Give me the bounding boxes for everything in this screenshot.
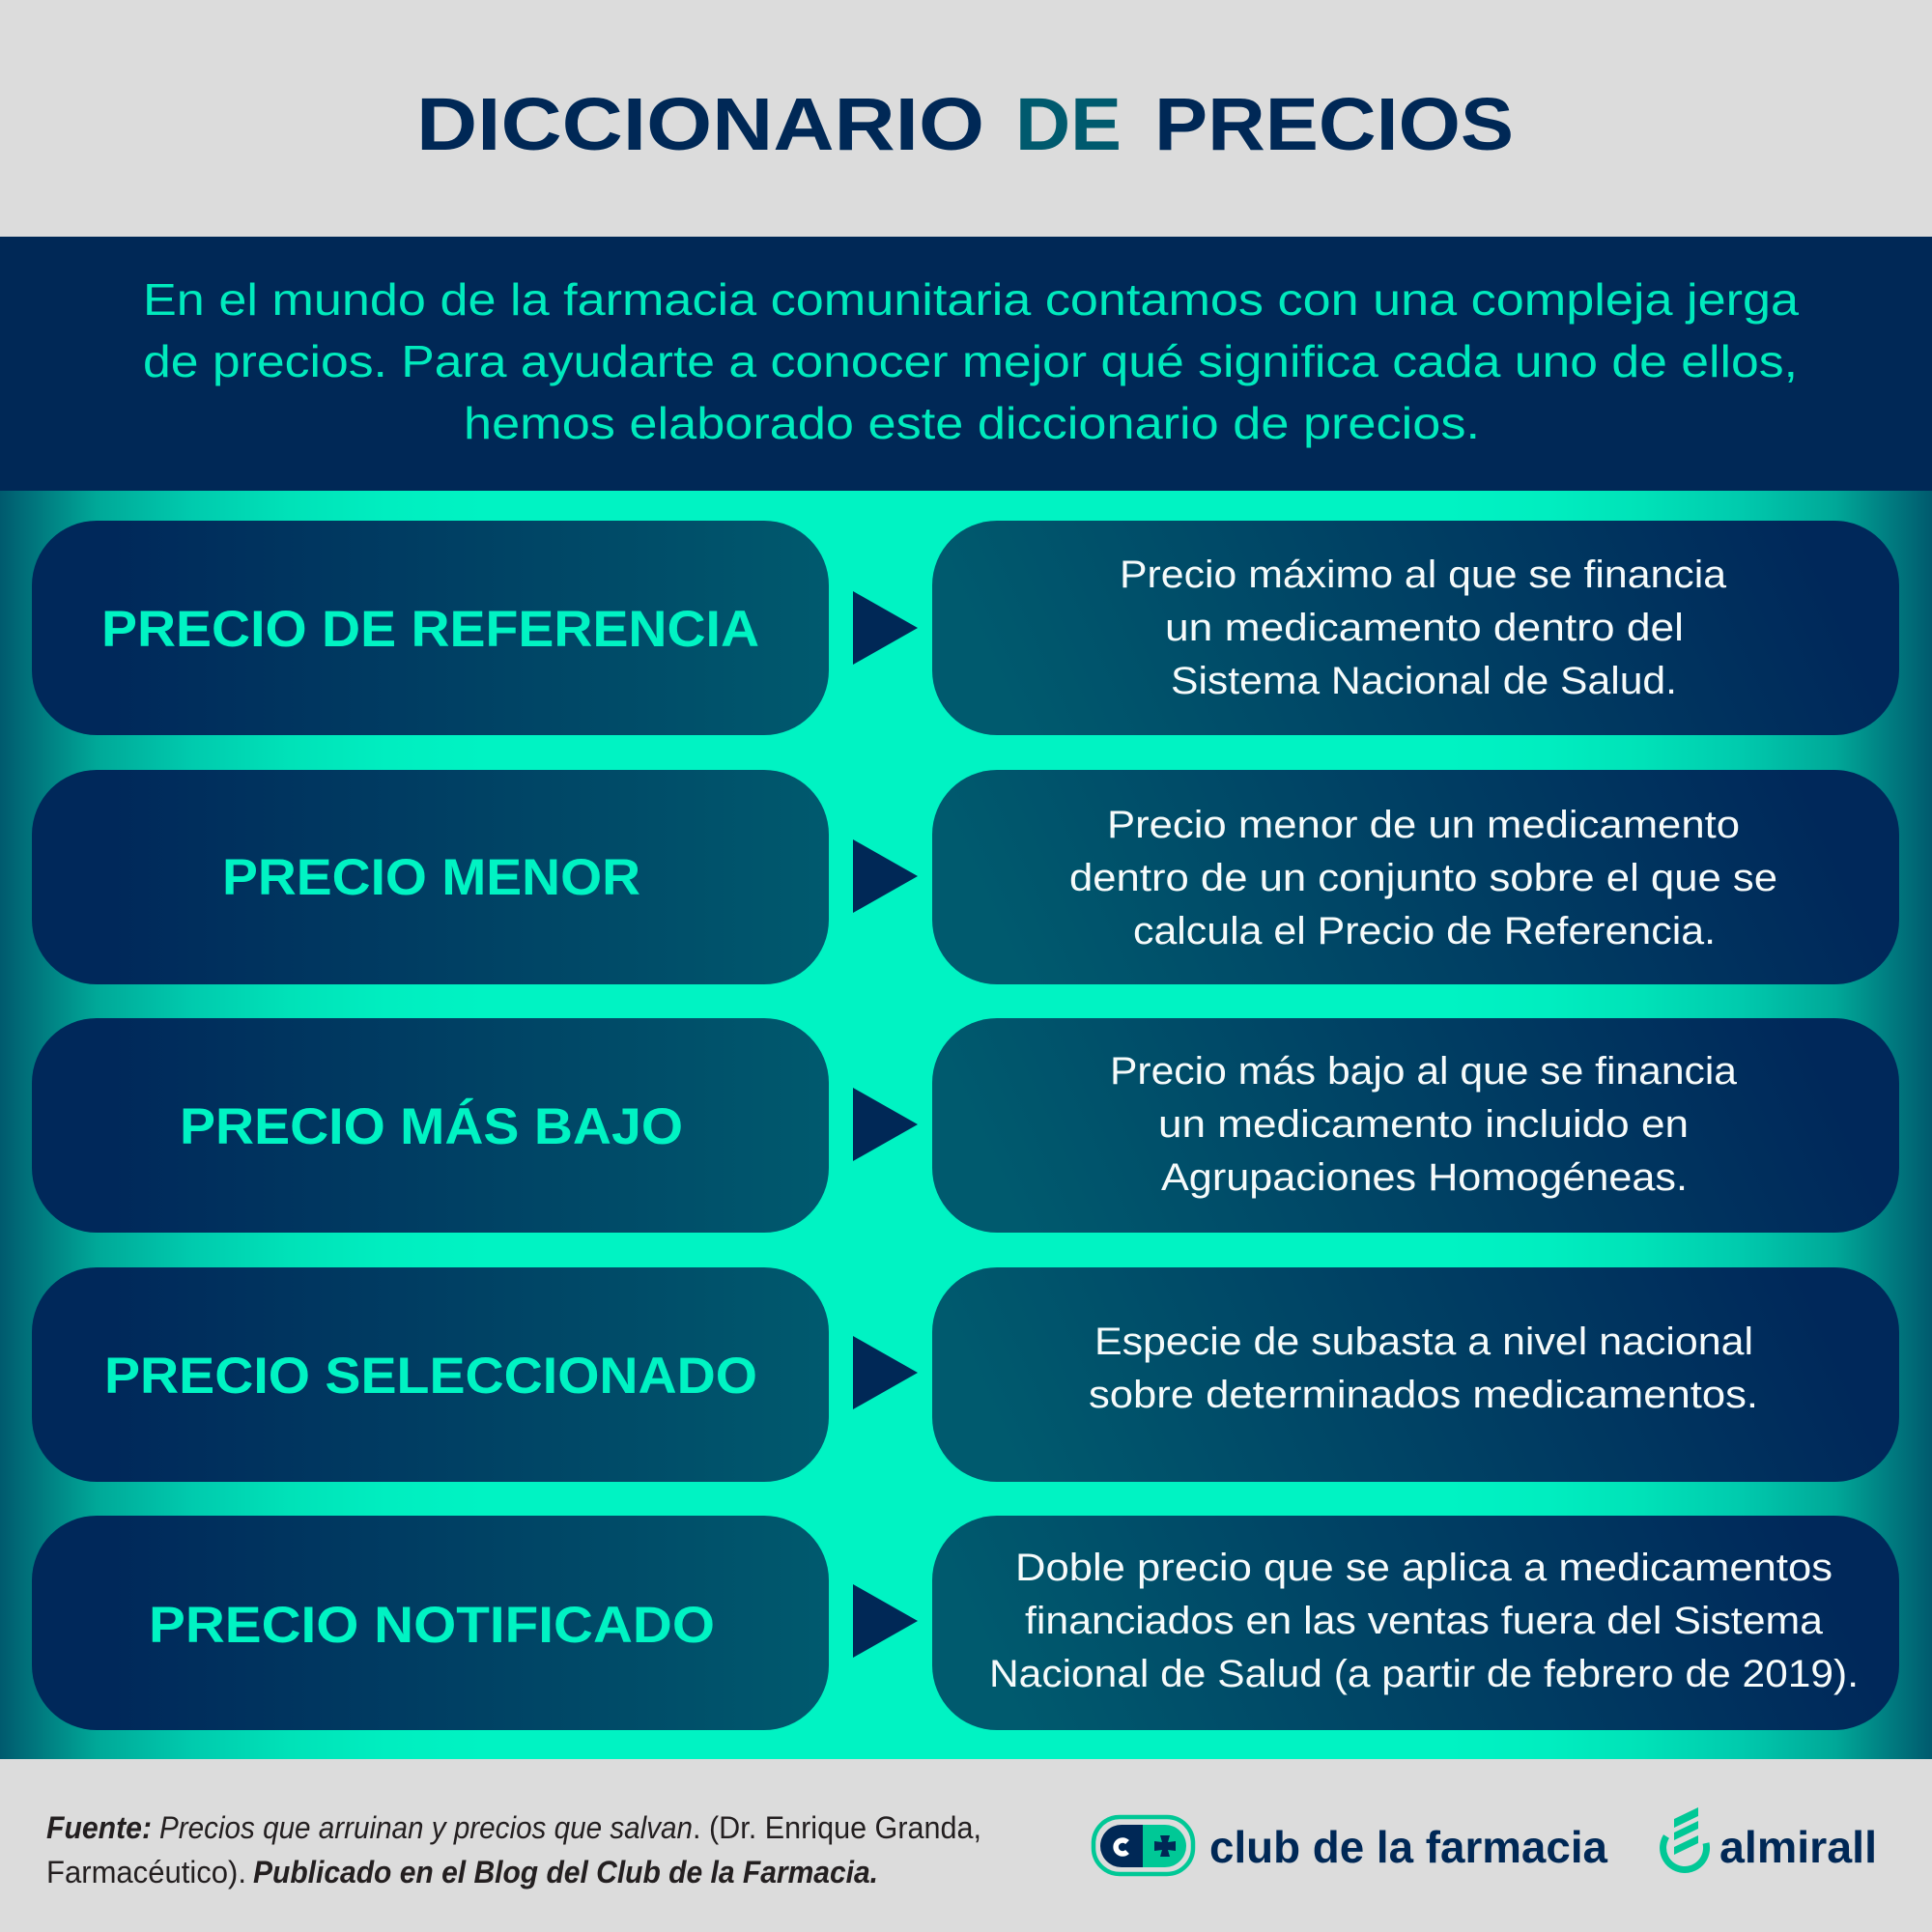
source text: . (Dr. Enrique Granda, [693, 1810, 981, 1845]
definition text [1069, 804, 1777, 952]
term box [32, 770, 829, 984]
definition text: Doble precio que se aplica a medicamentos [1015, 1547, 1833, 1589]
definition text: Agrupaciones Homogéneas. [1161, 1156, 1688, 1199]
definition box [932, 1018, 1899, 1233]
definition text: dentro de un conjunto sobre el que se [1069, 857, 1777, 899]
intro text: hemos elaborado este diccionario de precios. [464, 398, 1480, 448]
definition box [932, 521, 1899, 735]
definition text: Especie de subasta a nivel nacional [1094, 1321, 1753, 1363]
definition text: Sistema Nacional de Salud. [1171, 660, 1677, 702]
header band [0, 0, 1932, 237]
source text: Fuente: [46, 1810, 152, 1845]
row 5: precio notificado [32, 1516, 1899, 1730]
title: PRECIOS [1154, 83, 1514, 166]
definition text: un medicamento incluido en [1158, 1103, 1689, 1146]
wordmark: almirall [1719, 1822, 1877, 1872]
definition text [1110, 1050, 1738, 1199]
gradient background panel [0, 491, 1932, 1759]
row 1: precio de referencia [32, 521, 1899, 735]
definition box [932, 1267, 1899, 1482]
arrow [853, 839, 918, 913]
intro text: En el mundo de la farmacia comunitaria contamos con una compleja jerga [143, 274, 1799, 325]
definition text [1120, 554, 1727, 702]
definition text: Precio máximo al que se financia [1120, 554, 1727, 596]
definition text [989, 1547, 1859, 1695]
arrow [853, 1088, 918, 1161]
title: DICCIONARIO [416, 83, 984, 166]
definition text: Precio más bajo al que se financia [1110, 1050, 1738, 1093]
footer band [0, 1759, 1932, 1932]
definition text: financiados en las ventas fuera del Sistema [1025, 1600, 1824, 1642]
icon: ring [1663, 1836, 1707, 1869]
title [416, 83, 1514, 166]
term box [32, 1516, 829, 1730]
source text: Precios que arruinan y precios que salvan [159, 1810, 693, 1845]
arrow [853, 1336, 918, 1409]
term label: PRECIO DE REFERENCIA [101, 601, 759, 658]
term box [32, 1267, 829, 1482]
definition box [932, 1516, 1899, 1730]
term label: PRECIO MÁS BAJO [180, 1097, 683, 1155]
intro band [0, 237, 1932, 491]
intro text: de precios. Para ayudarte a conocer mejor qué significa cada uno de ellos, [143, 336, 1798, 386]
definition text: Precio menor de un medicamento [1107, 804, 1740, 846]
icon: card left half [1100, 1825, 1143, 1867]
logo: almirall [1663, 1807, 1877, 1872]
definition text: Nacional de Salud (a partir de febrero de 2019). [989, 1653, 1859, 1695]
term label: PRECIO NOTIFICADO [149, 1597, 715, 1654]
definition box [932, 770, 1899, 984]
definition text: calcula el Precio de Referencia. [1133, 910, 1716, 952]
icon: plus [1154, 1835, 1176, 1857]
source text: Publicado en el Blog del Club de la Farmacia. [253, 1855, 878, 1889]
icon: letter C shape [1116, 1840, 1127, 1854]
source text [46, 1810, 981, 1889]
intro text [143, 274, 1799, 448]
wordmark: club de la farmacia [1209, 1822, 1607, 1872]
term label: PRECIO SELECCIONADO [104, 1348, 757, 1405]
term box [32, 521, 829, 735]
definition text: sobre determinados medicamentos. [1089, 1374, 1758, 1416]
row 4: precio seleccionado [32, 1267, 1899, 1482]
arrow [853, 591, 918, 665]
source text: Farmacéutico). [46, 1855, 246, 1889]
definition text [1089, 1321, 1758, 1416]
icon: card right half [1143, 1825, 1186, 1867]
term label: PRECIO MENOR [222, 849, 640, 906]
row 3: precio mas bajo [32, 1018, 1899, 1233]
icon: stripes [1674, 1807, 1698, 1855]
icon: card ring [1094, 1817, 1193, 1874]
logo: club de la farmacia [1094, 1817, 1607, 1874]
term box [32, 1018, 829, 1233]
arrow [853, 1584, 918, 1658]
title: DE [1015, 83, 1122, 166]
definition text: un medicamento dentro del [1165, 607, 1684, 649]
row 2: precio menor [32, 770, 1899, 984]
